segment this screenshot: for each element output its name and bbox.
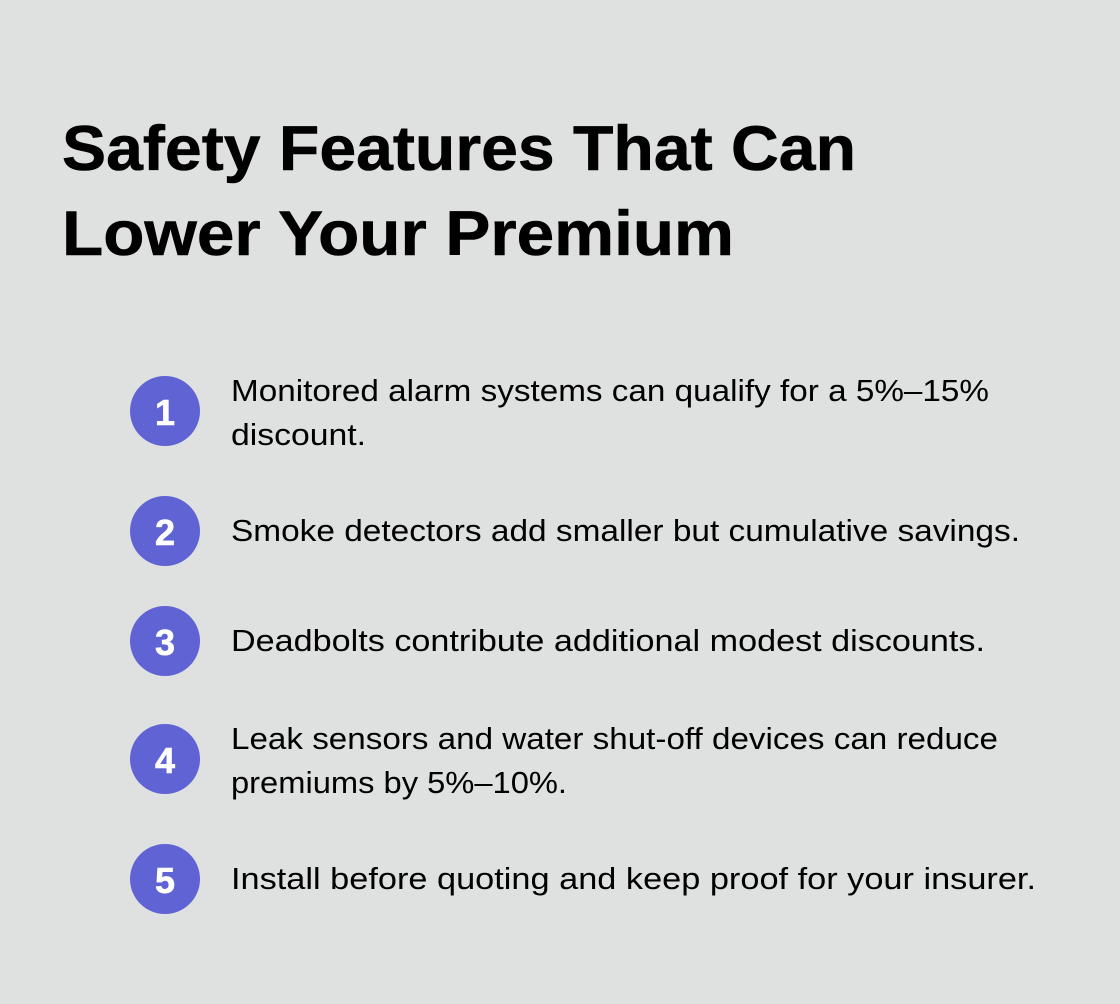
list item 4 [130, 721, 998, 800]
title [62, 114, 856, 269]
item 4 text [231, 721, 998, 800]
list item 5 [130, 844, 1036, 914]
number badge 2 [130, 496, 200, 566]
item 3 text: Deadbolts contribute additional modest discounts. [231, 623, 985, 658]
item 1 text: discount. [231, 417, 366, 452]
number badge 5 [130, 844, 200, 914]
number badge 3: 3 [155, 622, 175, 663]
number badge 3 [130, 606, 200, 676]
item 1 text: Monitored alarm systems can qualify for a 5%–15% [231, 373, 989, 408]
number badge 2: 2 [155, 512, 175, 553]
title: Lower Your Premium [62, 199, 734, 269]
item 4 text: premiums by 5%–10%. [231, 765, 567, 800]
item 1 text [231, 373, 989, 452]
list item 2 [130, 496, 1020, 566]
number badge 4 [130, 724, 200, 794]
number badge 4: 4 [155, 740, 175, 781]
number badge 1 [130, 376, 200, 446]
list item 1 [130, 373, 989, 452]
item 2 text: Smoke detectors add smaller but cumulative savings. [231, 513, 1020, 548]
list item 3 [130, 606, 985, 676]
title: Safety Features That Can [62, 114, 856, 184]
number badge 5: 5 [155, 860, 175, 901]
number badge 1: 1 [155, 392, 175, 433]
item 4 text: Leak sensors and water shut-off devices can reduce [231, 721, 998, 756]
item 5 text: Install before quoting and keep proof for your insurer. [231, 861, 1036, 896]
